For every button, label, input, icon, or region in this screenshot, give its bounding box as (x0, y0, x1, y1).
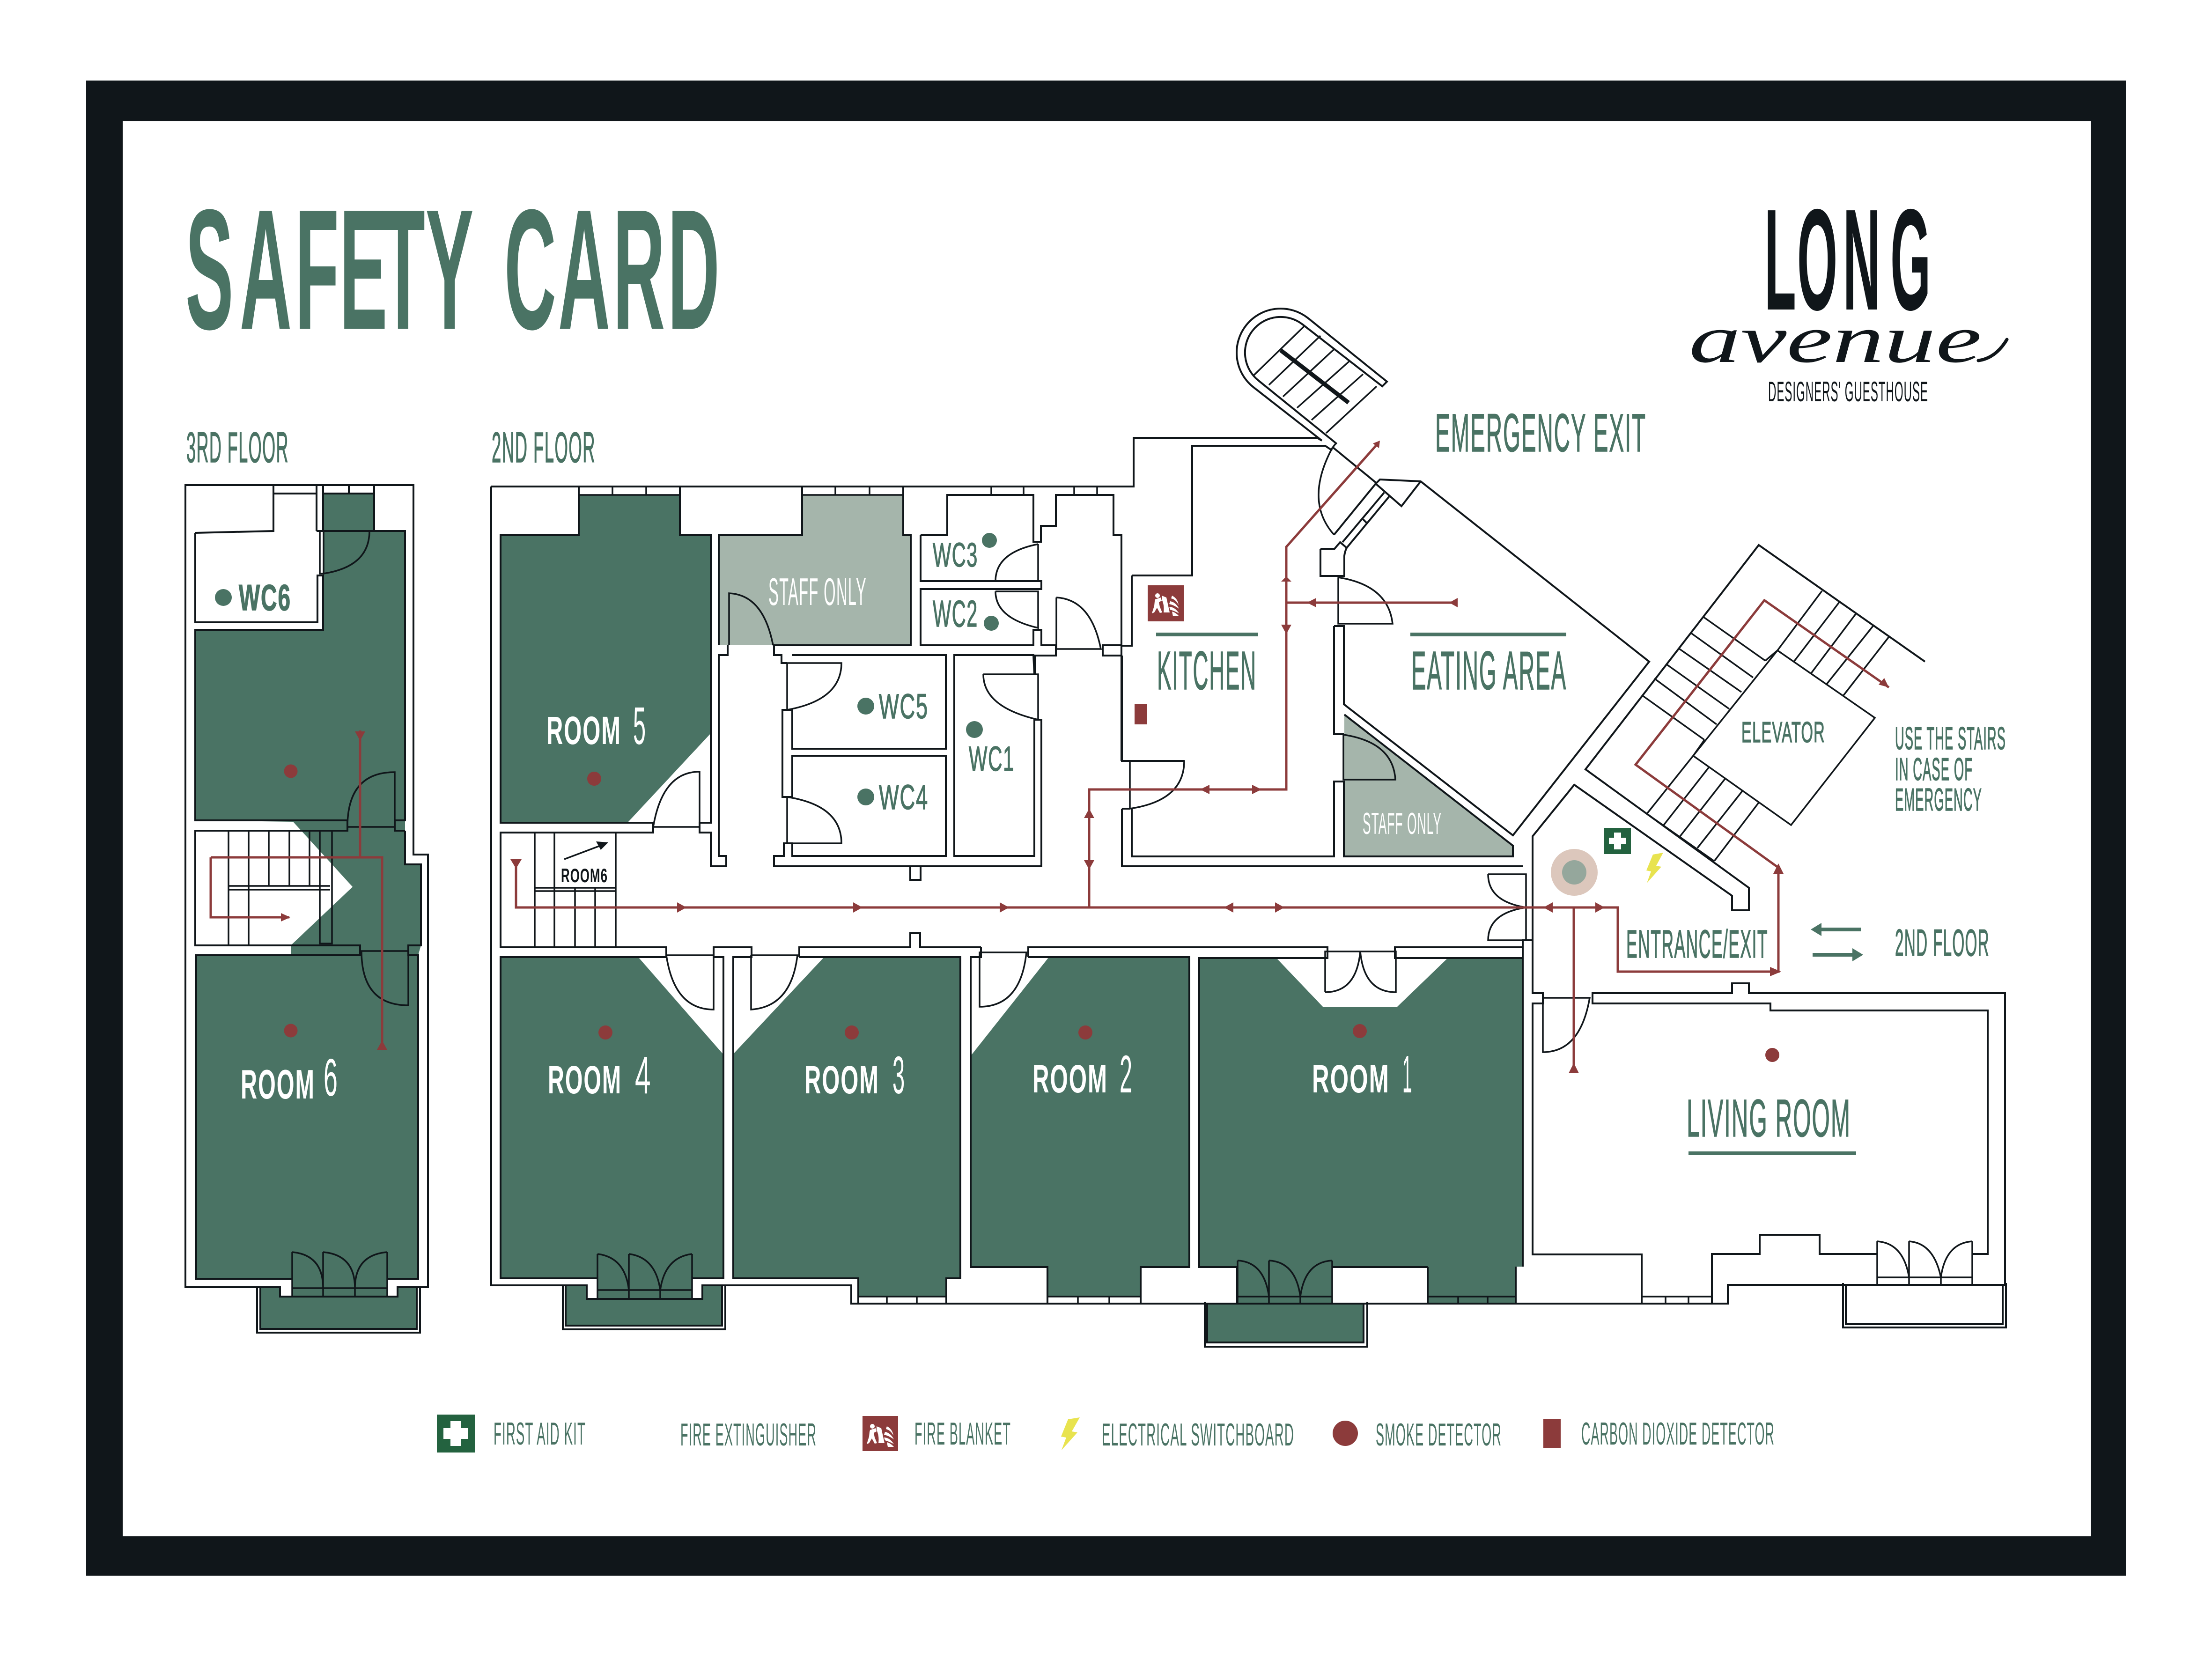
balcony: room 4 (563, 1285, 725, 1329)
floor plan: 2nd floor: EATING AREA (1411, 640, 1567, 701)
floor plan: 2nd floor: 1 (1402, 1045, 1413, 1104)
logo: avenue (1689, 302, 1982, 377)
logo (1689, 179, 2007, 407)
walls: elevator and stairs (1642, 591, 1889, 861)
label: room 3 (804, 1046, 906, 1105)
text: USE THE STAIRS (1895, 721, 2006, 756)
logo: LONG (1764, 179, 1931, 341)
floor plan: 2nd floor: STAFF ONLY (1363, 806, 1442, 841)
legend: FIRST AID KIT (494, 1416, 586, 1452)
room fill: staff only triangle (1344, 715, 1513, 856)
legend: fire blanket (863, 1416, 1011, 1452)
room fill: room 2 (971, 957, 1189, 1297)
balcony doors: living room (1877, 1241, 1972, 1285)
label: room 5 (546, 696, 647, 755)
text: 2ND FLOOR (492, 424, 596, 472)
label: WC3: WC3 (933, 537, 978, 574)
label: WC6 (215, 577, 291, 618)
label: elevator: ELEVATOR (1741, 716, 1825, 749)
floor plan: 2nd floor (491, 309, 2006, 1347)
walls: 3rd floor (185, 485, 428, 1333)
floor plan: 2nd floor: LIVING ROOM (1687, 1089, 1851, 1148)
windows (579, 487, 1712, 1304)
floor plan: 2nd floor: EMERGENCY EXIT (1435, 403, 1646, 463)
heading bar: living room (1688, 1151, 1856, 1155)
floor plan: 2nd floor: 5 (633, 696, 647, 755)
label: WC1 (966, 721, 1015, 778)
legend: ELECTRICAL SWITCHBOARD (1102, 1417, 1294, 1453)
icon: fire blanket (kitchen) (1148, 585, 1184, 621)
label: WC4 (857, 778, 929, 817)
label: room 1 (1312, 1045, 1413, 1104)
label: room 6 (241, 1048, 339, 1107)
legend: FIRE EXTINGUISHER (680, 1417, 817, 1453)
legend: FIRE BLANKET (914, 1416, 1011, 1452)
label: stairs note: IN CASE OF (1895, 752, 1973, 787)
room fill: room 3 (733, 957, 960, 1297)
route arrows: 2nd floor (510, 441, 1889, 1073)
floor plan: 2nd floor: ENTRANCE/EXIT (1626, 922, 1768, 966)
balcony doors: room 1 (1238, 1261, 1332, 1304)
floor plan: 3rd floor (185, 485, 428, 1333)
route arrows: 3rd floor (281, 731, 387, 1050)
label: WC5 (857, 687, 929, 726)
legend: electrical switchboard (1061, 1417, 1294, 1453)
legend: SMOKE DETECTOR (1376, 1417, 1502, 1453)
doors: 3rd floor (292, 531, 408, 1297)
icon: electrical switchboard (1646, 853, 1663, 883)
icon: fire extinguisher marker (1551, 849, 1598, 896)
balcony fill: 3rd floor (260, 1287, 417, 1329)
label: WC2: WC2 (933, 593, 978, 634)
icon: first aid kit (1604, 828, 1631, 854)
room fill: room 4 (501, 957, 723, 1299)
label: room 4 (548, 1046, 652, 1105)
text: CARBON DIOXIDE DETECTOR (1581, 1416, 1775, 1452)
arrow: to room 6: ROOM6 (561, 864, 608, 886)
stairs: 3rd floor (229, 831, 332, 945)
label: WC4: WC4 (879, 778, 929, 817)
label: room 5: ROOM (546, 708, 621, 752)
heading bar: kitchen (1156, 633, 1258, 636)
label: stairs note: EMERGENCY (1895, 782, 1982, 818)
floor plan: 2nd floor: STAFF ONLY (768, 570, 867, 613)
label: WC6: WC6 (239, 577, 291, 618)
walls: west stairs (535, 832, 616, 947)
balcony doors: room 4 (597, 1254, 692, 1299)
heading bar: eating area (1410, 633, 1566, 636)
logo: DESIGNERS' GUESTHOUSE (1768, 376, 1928, 407)
label: room 2 (1032, 1045, 1133, 1104)
room fill: room 1 (1199, 957, 1523, 1304)
floor plan: 3rd floor: 6 (324, 1048, 339, 1107)
floor plan: 2nd floor: KITCHEN (1157, 640, 1257, 701)
label: room 4: 4 (635, 1046, 652, 1105)
arrow: to room 6 (561, 841, 608, 886)
balcony fill: room 1 (1207, 1304, 1364, 1342)
arrow: to 2nd floor (1811, 923, 1863, 961)
floor plan: 2nd floor: 2 (1120, 1045, 1133, 1104)
walls: west rooms and WCs (491, 438, 2005, 1304)
label: room 1: ROOM (1312, 1057, 1390, 1101)
balcony fill: room 4 (566, 1285, 722, 1326)
room fill: room 5 (501, 495, 711, 823)
label: WC1: WC1 (969, 739, 1015, 778)
label: room 4: ROOM (548, 1058, 622, 1102)
text: 3RD FLOOR (186, 424, 289, 472)
legend: carbon dioxide detector (1543, 1416, 1775, 1452)
label: room 3: ROOM (804, 1058, 879, 1102)
room fill: staff only (719, 495, 911, 645)
label: WC5: WC5 (879, 687, 929, 726)
legend: smoke detector (1333, 1417, 1502, 1453)
balcony: room 1 (1205, 1302, 1367, 1347)
room fill: room 6 and hallway (195, 494, 421, 1297)
label: room 6: ROOM (241, 1061, 315, 1107)
balcony: living room (1843, 1283, 2006, 1327)
smoke detectors: 3rd floor (284, 764, 298, 1038)
title: SAFETY CARD (185, 174, 720, 365)
legend (437, 1415, 1775, 1453)
label: room 2: ROOM (1032, 1057, 1108, 1101)
doors: 2nd floor (653, 448, 1590, 1052)
label: stairs note (1895, 721, 2006, 818)
text: 2ND FLOOR (1895, 922, 1990, 964)
walls: kitchen and eating area (1122, 438, 1925, 940)
floor plan: 2nd floor: 3 (892, 1046, 906, 1105)
legend: first aid kit (437, 1415, 586, 1453)
escape route: 3rd floor (211, 730, 382, 1050)
smoke detectors: 2nd floor (587, 772, 1779, 1062)
icon: carbon dioxide detector (kitchen) (1135, 704, 1147, 724)
emergency stairs (1237, 309, 1387, 448)
escape route: 2nd floor (516, 445, 1889, 1073)
